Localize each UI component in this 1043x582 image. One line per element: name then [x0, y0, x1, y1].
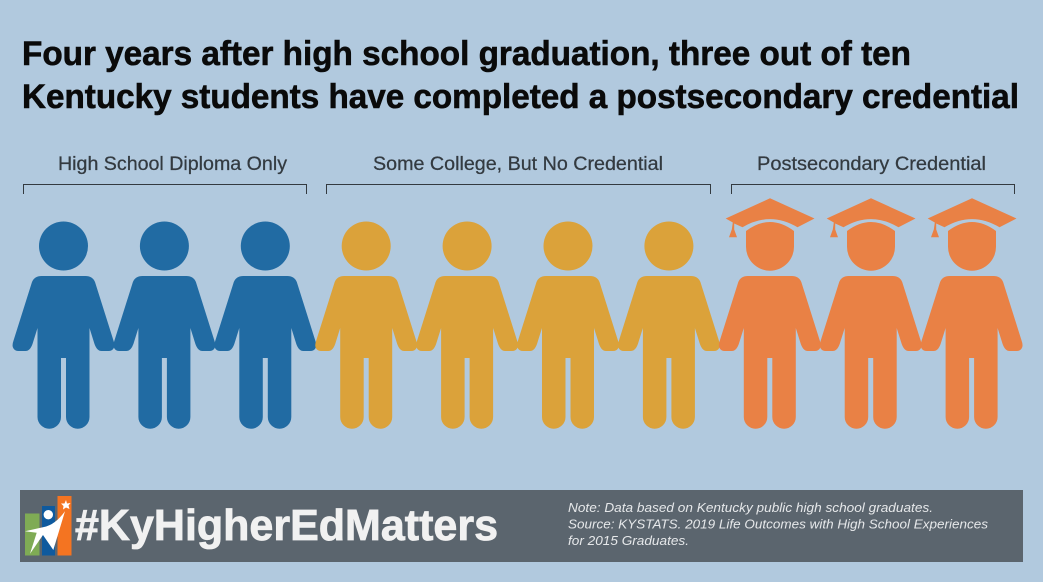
- title: Kentucky students have completed a postsecondary credential: [22, 78, 1019, 116]
- category label: postsecondary credential: Postsecondary Credential: [757, 154, 986, 175]
- category label: high school diploma only: [24, 154, 306, 194]
- people: some college: [315, 222, 720, 429]
- title: [22, 35, 1019, 116]
- icon: logo: [25, 496, 72, 556]
- people: high school diploma only: [13, 222, 316, 429]
- note and source: for 2015 Graduates.: [568, 533, 689, 548]
- category label: some college: [326, 154, 710, 194]
- people: postsecondary credential with graduation caps: [719, 198, 1023, 429]
- note and source: Source: KYSTATS. 2019 Life Outcomes with High School Experiences: [568, 516, 989, 532]
- title: Four years after high school graduation, three out of ten: [22, 35, 911, 73]
- category label: postsecondary credential: [732, 154, 1014, 194]
- note and source: Note: Data based on Kentucky public high school graduates.: [568, 500, 933, 515]
- category label: some college: Some College, But No Credential: [373, 154, 663, 175]
- note and source: [568, 500, 989, 548]
- hashtag: #KyHigherEdMatters: [75, 502, 498, 550]
- category label: high school diploma only: High School Diploma Only: [58, 154, 288, 175]
- footer bar: [20, 490, 1023, 562]
